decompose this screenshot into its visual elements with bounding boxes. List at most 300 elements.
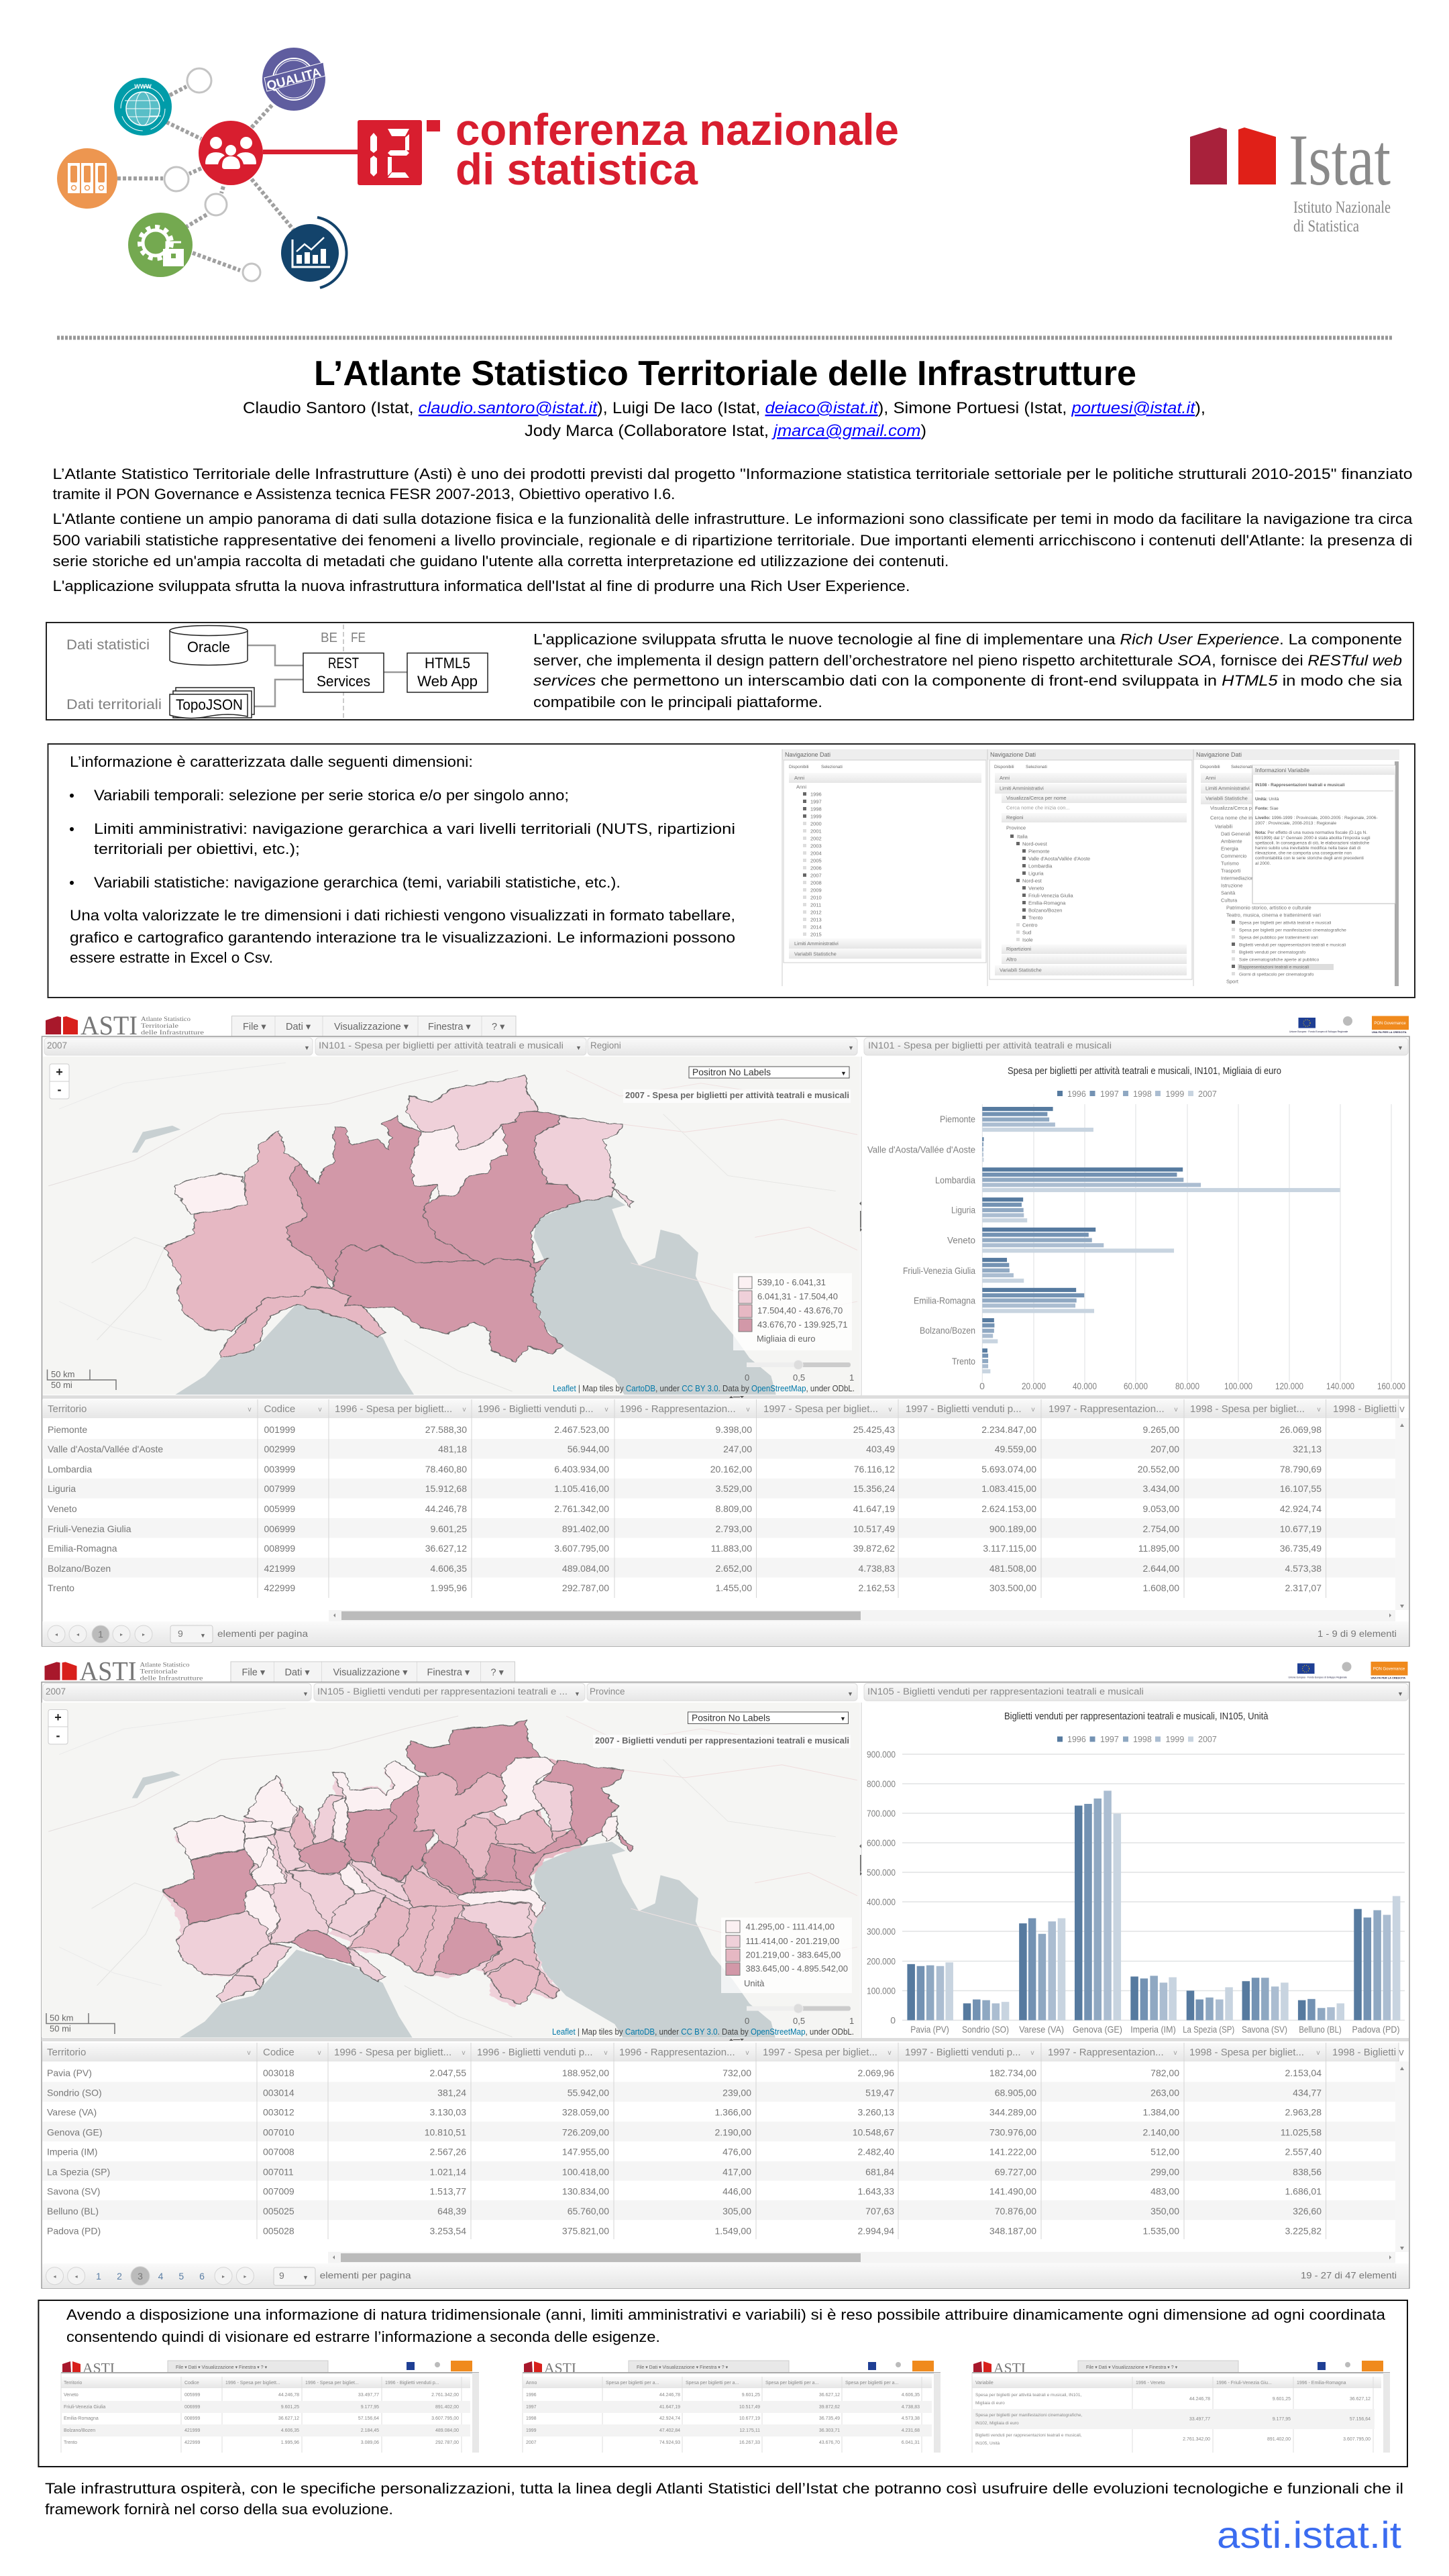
popup: informazioni variabile: rilevazione, che ne comporta una coseguente non: [1255, 851, 1352, 856]
screenshot: limiti amministrativi navigation: Nord-ovest: [1022, 841, 1048, 847]
intro text: L'applicazione sviluppata sfrutta la nuova infrastruttura informatica dell'Istat al fine di produrre una Rich User Experience.: [52, 578, 910, 594]
toolbar selects: ▼: [1397, 1690, 1403, 1697]
data table: province: 838,56: [1293, 2166, 1322, 2177]
screenshot: limiti amministrativi navigation: Province: [1006, 824, 1026, 830]
data table: regioni: 207,00: [1150, 1444, 1179, 1454]
thumbnail: table by variable: 2.761.342,00: [1183, 2437, 1210, 2442]
data table: province: 483,00: [1150, 2186, 1179, 2197]
table pager: elementi per pagina: [320, 2270, 411, 2281]
screenshot: variabili navigation with popup: Istruzione: [1221, 882, 1243, 888]
data table: province: v: [1316, 2049, 1320, 2057]
table pager: 5: [178, 2271, 184, 2282]
data table: province: 65.760,00: [568, 2206, 609, 2216]
data table: province: 730.976,00: [989, 2127, 1036, 2137]
thumbnail: table by year: 4.738,83: [902, 2405, 920, 2410]
data table: province: 130.834,00: [562, 2186, 609, 2197]
toolbar selects: 2007: [46, 1686, 66, 1697]
data table: regioni: 403,49: [866, 1444, 895, 1454]
chart legend: 1998: [1133, 1089, 1152, 1099]
architecture text: compatibile con le principali piattaforme.: [533, 694, 822, 710]
chart legend: 1997: [1100, 1089, 1119, 1099]
thumbnail: table by territory: 44.246,78: [278, 2393, 299, 2398]
data table: regioni: 10.677,19: [1280, 1523, 1322, 1534]
data table: regioni: v: [1318, 1406, 1320, 1413]
map legend: 539,10 - 6.041,31: [757, 1277, 826, 1287]
screenshot: anni navigation: [782, 749, 987, 986]
toolbar selects: Regioni: [590, 1040, 621, 1051]
table pager: 2: [117, 2271, 122, 2282]
screenshot: variabili navigation with popup: Variabili: [1215, 823, 1232, 829]
data table: province: 1998 - Biglietti v: [1332, 2047, 1404, 2058]
data table: province: 007010: [263, 2127, 294, 2137]
toolbar selects: ▼: [847, 1690, 853, 1697]
screenshot: limiti amministrativi navigation: Visualizza/Cerca per nome: [1006, 795, 1067, 801]
data table: regioni: 9.601,25: [431, 1523, 467, 1534]
toolbar selects: IN105 - Biglietti venduti per rappresentazioni teatrali e musicali: [867, 1686, 1144, 1697]
table pager: 4: [158, 2271, 164, 2282]
data table: province: 2.482,40: [857, 2147, 894, 2157]
bar chart: spesa per regione: 0: [979, 1381, 985, 1391]
data table: regioni: 76.116,12: [854, 1464, 895, 1474]
thumbnail: table by territory: Veneto: [64, 2393, 78, 2398]
data table: province: 1998 - Spesa per bigliet...: [1189, 2047, 1304, 2058]
data table: regioni: 2.652,00: [715, 1563, 752, 1574]
thumbnail: table by year: 41.647,19: [659, 2405, 680, 2410]
screenshot: limiti amministrativi navigation: Centro: [1022, 922, 1038, 928]
table pager: 3: [138, 2271, 143, 2282]
screenshot: variabili navigation with popup: Trasporti: [1221, 867, 1241, 873]
opacity slider: 1: [849, 1373, 854, 1383]
icon: gear and padlock: [128, 213, 193, 277]
toolbar selects: [44, 1038, 1408, 1055]
dimensions text: Variabili temporali: selezione per serie storica e/o per singolo anno;: [94, 787, 569, 804]
thumbnail: table by variable: Migliaia di euro: [975, 2401, 1005, 2406]
data table: regioni: 27.588,30: [425, 1424, 467, 1435]
ASTI header: [44, 1656, 1407, 1686]
data table: province: Territorio: [47, 2047, 86, 2058]
data table: province: v: [888, 2049, 891, 2057]
screenshot: limiti amministrativi navigation: Valle d'Aosta/Vallée d'Aoste: [1028, 856, 1090, 862]
intro text: [52, 466, 1413, 594]
data table: province: 005028: [263, 2225, 294, 2236]
panel text: [66, 2306, 1386, 2345]
panel: dimensions: [48, 744, 1415, 998]
data table: regioni: Codice: [264, 1403, 295, 1415]
thumbnail: table by variable: Biglietti venduti per rappresentazioni teatrali e musicali,: [975, 2433, 1082, 2438]
screenshot: limiti amministrativi navigation: Piemonte: [1028, 849, 1050, 855]
opacity slider: [745, 2004, 854, 2026]
conference name: di statistica: [455, 144, 698, 194]
column chart: biglietti per provincia: 900.000: [867, 1749, 896, 1760]
data table: regioni: 1.105.416,00: [554, 1483, 609, 1494]
screenshot: anni navigation: 2002: [810, 836, 822, 841]
data table: regioni: 41.647,19: [853, 1503, 895, 1514]
icon: people hub: [199, 121, 263, 185]
data table: province: 007009: [263, 2186, 294, 2197]
data table: regioni: 15.356,24: [853, 1483, 895, 1494]
thumbnail: table by variable: 57.156,64: [1350, 2417, 1371, 2422]
column chart: biglietti per provincia: 800.000: [867, 1778, 896, 1789]
thumbnail: table by year: 36.627,12: [819, 2393, 840, 2398]
table pager: ▸: [244, 2273, 246, 2279]
data table: province: 1997 - Spesa per bigliet...: [763, 2047, 877, 2058]
bar chart: spesa per regione: 40.000: [1073, 1381, 1097, 1391]
screenshot: limiti amministrativi navigation: Italia: [1017, 834, 1028, 840]
thumbnail: table by year: 1997: [526, 2405, 537, 2410]
dimensions text: grafico e cartografico garantendo interazione tra le visualizzazioni. Le informazioni possono: [70, 929, 735, 946]
screenshot: variabili navigation with popup: Spesa per biglietti per manifestazioni cinematografiche: [1239, 928, 1346, 933]
screenshot: variabili navigation with popup: Sale cinematografiche aperte al pubblico: [1239, 958, 1319, 963]
popup: informazioni variabile: Informazioni Variabile: [1255, 767, 1309, 773]
map scale: 50 mi: [50, 2024, 71, 2034]
data table: province: 69.727,00: [995, 2166, 1036, 2177]
panel: application screen 1 (regioni): [42, 1010, 1409, 1646]
data table: province: v: [462, 2049, 466, 2057]
data table: province: 182.734,00: [989, 2068, 1036, 2078]
thumbnail: table by variable: File ▾ Dati ▾ Visualizzazione ▾ Finestra ▾ ? ▾: [1086, 2365, 1178, 2370]
popup: informazioni variabile: al 2000.: [1255, 861, 1271, 866]
thumbnail: table by year: 1998: [526, 2416, 537, 2421]
column chart: biglietti per provincia: 600.000: [867, 1837, 896, 1848]
thumbnail: table by year: 39.872,62: [819, 2405, 840, 2410]
data table: regioni: 42.924,74: [1280, 1503, 1322, 1514]
screenshot: variabili navigation with popup: Giorni di spettacolo per cinematografo: [1239, 973, 1314, 977]
data table: regioni: 36.735,49: [1280, 1543, 1322, 1554]
thumbnail: table by variable: Variabile: [975, 2381, 994, 2385]
bar chart: spesa per regione: 60.000: [1124, 1381, 1148, 1391]
data table: regioni: Bolzano/Bozen: [48, 1563, 111, 1574]
data table: regioni: 39.872,62: [853, 1543, 895, 1554]
thumbnail: table by year: Anno: [526, 2381, 537, 2385]
column chart: biglietti per provincia: Imperia (IM): [1130, 2024, 1176, 2035]
intro text: 500 variabili statistiche rappresentative dei fenomeni a livello provinciale, regionale e di ripartizione territoriale. Due importanti elementi arricchiscono i contenuti dell'Atlante: la presenza di: [52, 532, 1413, 549]
data table: regioni: 20.552,00: [1138, 1464, 1179, 1474]
popup: informazioni variabile: 2007 : Provinciale, 2008-2013 : Regionale: [1255, 821, 1336, 826]
table pager: ◂: [55, 1631, 58, 1638]
data table: regioni: 1996 - Rappresentazion...: [620, 1403, 736, 1415]
data table: regioni: 008999: [264, 1543, 295, 1554]
data table: province: 263,00: [1150, 2087, 1179, 2098]
screenshot: anni navigation: Navigazione Dati: [785, 751, 830, 758]
opacity slider: 0,5: [793, 1373, 805, 1383]
architecture text: services che permettono un interscambio dati con la componente di front-end sviluppata in HTML5 in modo che sia: [533, 672, 1403, 689]
screenshot: anni navigation: 2010: [810, 895, 822, 900]
screenshot: variabili navigation with popup: Navigazione Dati: [1196, 751, 1242, 758]
column chart: biglietti per provincia: 700.000: [867, 1808, 896, 1819]
thumbnail: table by variable: Spesa per biglietti per manifestazioni cinematografiche,: [975, 2413, 1083, 2418]
table pager: ▼: [200, 1632, 206, 1639]
data table: regioni: 247,00: [723, 1444, 752, 1454]
data table: province: 375.821,00: [562, 2225, 609, 2236]
icon: www globe: [114, 78, 172, 136]
screenshot: anni navigation: 2007: [810, 872, 822, 879]
screenshot: limiti amministrativi navigation: Regioni: [1006, 814, 1024, 820]
bar chart: spesa per regione: Piemonte: [940, 1114, 975, 1124]
data table: province: 726.209,00: [562, 2127, 609, 2137]
column chart: biglietti per provincia: Padova (PD): [1352, 2024, 1399, 2035]
screenshot: variabili navigation with popup: Biglietti venduti per cinematografo: [1239, 951, 1306, 955]
data table: regioni: [42, 1395, 1409, 1646]
toolbar selects: ▼: [574, 1690, 580, 1697]
data table: regioni: 1996 - Spesa per bigliett...: [335, 1403, 452, 1415]
thumbnail: table by year: 12.175,11: [739, 2428, 760, 2433]
data table: regioni: 3.607.795,00: [554, 1543, 609, 1554]
screenshot: variabili navigation with popup: Rappresentazioni teatrali e musicali: [1239, 965, 1309, 970]
ASTI header: File ▾: [243, 1022, 266, 1032]
screenshot: anni navigation: Disponibili: [789, 765, 809, 769]
map legend: [721, 1917, 852, 1993]
ASTI header: PON Governance: [1373, 1668, 1405, 1672]
screenshot: limiti amministrativi navigation: Anni: [1000, 775, 1010, 781]
screenshot: anni navigation: Variabili Statistiche: [794, 951, 837, 957]
data table: regioni: 1997 - Rappresentazion...: [1049, 1403, 1165, 1415]
data table: province: 1.513,77: [429, 2186, 466, 2197]
panel: tridimensional information: [38, 2300, 1407, 2467]
ASTI header: ? ▾: [491, 1668, 504, 1678]
map controls: [50, 1064, 851, 1103]
screenshot: variabili navigation with popup: Spesa per biglietti per attività teatrali e musicali: [1239, 921, 1332, 926]
authors: [243, 399, 1205, 440]
data table: regioni: 001999: [264, 1424, 295, 1435]
opacity slider: 1: [849, 2016, 854, 2026]
architecture diagram: BE: [321, 631, 337, 645]
data table: province: Padova (PD): [47, 2225, 101, 2236]
map controls: [48, 1709, 851, 1748]
data table: province: 2.069,96: [857, 2068, 894, 2078]
thumbnail: table by territory: 292.787,00: [435, 2440, 459, 2445]
data table: regioni: 2.793,00: [715, 1523, 752, 1534]
map controls: -: [56, 1729, 60, 1742]
data table: regioni: 007999: [264, 1483, 295, 1494]
data table: province: 003012: [263, 2107, 294, 2118]
screenshot: anni navigation: 2013: [810, 916, 822, 923]
thumbnail: table by territory: 1.995,96: [281, 2440, 299, 2445]
thumbnail: table by territory: Friuli-Venezia Giulia: [64, 2405, 105, 2410]
toolbar selects: ▼: [303, 1690, 309, 1697]
popup: informazioni variabile: confrontabilità con le serie storiche degli anni precedenti: [1255, 856, 1364, 861]
data table: regioni: 78.790,69: [1280, 1464, 1322, 1474]
data table: regioni: v: [605, 1406, 608, 1413]
screenshot: limiti amministrativi navigation: Liguria: [1028, 871, 1044, 877]
data table: regioni: v: [318, 1406, 322, 1413]
screenshot: limiti amministrativi navigation: Isole: [1022, 937, 1033, 943]
map controls: ▼: [840, 1715, 846, 1722]
popup: informazioni variabile: [1252, 765, 1395, 904]
thumbnail: table by year: 43.676,70: [819, 2440, 840, 2445]
data table: regioni: 49.559,00: [995, 1444, 1036, 1454]
thumbnail: table by territory: 421999: [184, 2428, 200, 2433]
screenshot: limiti amministrativi navigation: Trento: [1028, 915, 1042, 921]
column chart: biglietti per provincia: 400.000: [867, 1896, 896, 1907]
architecture diagram: Services: [317, 673, 370, 690]
data table: regioni: 10.517,49: [853, 1523, 895, 1534]
map legend: [733, 1273, 852, 1350]
title: L’Atlante Statistico Territoriale delle Infrastrutture: [314, 354, 1136, 393]
data table: regioni: 9.265,00: [1143, 1424, 1179, 1435]
screenshot: limiti amministrativi navigation: Veneto: [1028, 885, 1044, 892]
map controls: +: [56, 1065, 63, 1079]
popup: informazioni variabile: hanno subito una inevitabile modifica nella base dati di: [1255, 846, 1360, 851]
dimensions text: Limiti amministrativi: navigazione gerarchica a vari livelli territoriali (NUTS, ripartizioni: [94, 820, 735, 837]
architecture diagram: Dati statistici: [66, 637, 150, 653]
bar chart: spesa per regione: 120.000: [1275, 1381, 1303, 1391]
screenshot: anni navigation: 2009: [810, 887, 822, 894]
thumbnail: table by territory: 2.184,45: [361, 2428, 379, 2433]
screenshot: variabili navigation with popup: Commercio: [1221, 853, 1246, 859]
data table: regioni: 1998 - Biglietti v: [1333, 1403, 1405, 1415]
bar chart: spesa per regione: 80.000: [1175, 1381, 1199, 1391]
thumbnail: table by variable: 3.607.795,00: [1343, 2437, 1371, 2442]
bar chart: spesa per regione: Emilia-Romagna: [914, 1295, 975, 1305]
data table: regioni: 15.912,68: [425, 1483, 467, 1494]
thumbnail: table by year: 4.573,38: [902, 2416, 920, 2421]
screenshot: variabili navigation with popup: Disponibili: [1200, 765, 1220, 769]
ASTI header: Atlante Statistico: [140, 1661, 190, 1668]
thumbnail: table by territory: 1996 - Spesa per bigliett...: [225, 2381, 280, 2385]
map controls: -: [58, 1083, 62, 1096]
data table: province: 007008: [263, 2147, 294, 2157]
architecture text: server, che implementa il design pattern dell’orchestratore nel pieno rispetto architetturale SOA, fornisce dei RESTful web: [533, 652, 1402, 669]
data table: regioni: 2.234.847,00: [981, 1424, 1036, 1435]
data table: regioni: 1998 - Spesa per bigliet...: [1190, 1403, 1305, 1415]
data table: province: 1996 - Spesa per bigliett...: [334, 2047, 451, 2058]
screenshot: variabili navigation with popup: Ambiente: [1221, 838, 1242, 844]
data table: province: 1.021,14: [429, 2166, 466, 2177]
thumbnail: table by year: Spesa per biglietti per a...: [606, 2381, 659, 2385]
data table: regioni: 005999: [264, 1503, 295, 1514]
data table: regioni: 9.053,00: [1143, 1503, 1179, 1514]
data table: province: 434,77: [1293, 2087, 1322, 2098]
data table: regioni: 421999: [264, 1563, 295, 1574]
data table: province: 007011: [263, 2166, 294, 2177]
thumbnail: table by variable: Spesa per biglietti per attività teatrali e musicali, IN101,: [975, 2393, 1081, 2398]
data table: regioni: Valle d'Aosta/Vallée d'Aoste: [48, 1444, 163, 1454]
column chart: biglietti per provincia: Genova (GE): [1073, 2024, 1122, 2035]
popup: informazioni variabile: spettacoli. In conseguenza di ciò, le elaborazioni statistiche: [1255, 841, 1370, 845]
thumbnail: table by territory: 33.497,77: [358, 2393, 379, 2398]
data table: regioni: 2.761.342,00: [554, 1503, 609, 1514]
data table: province: 3.253,54: [429, 2225, 466, 2236]
column chart: biglietti per provincia: 500.000: [867, 1867, 896, 1878]
map attribution: Leaflet | Map tiles by CartoDB, under CC BY 3.0. Data by OpenStreetMap, under ODbL.: [553, 1383, 855, 1393]
data table: province: 2.557,40: [1285, 2147, 1322, 2157]
screenshot: anni navigation: Anni: [794, 775, 804, 781]
thumbnail: table by year: 9.601,25: [742, 2393, 760, 2398]
thumbnail: table by variable: [972, 2360, 1390, 2453]
ASTI header: ASTI: [79, 1656, 137, 1686]
popup: informazioni variabile: Livello: 1996-1999 : Provinciale, 2000-2005 : Regionale, 2006-: [1255, 816, 1378, 820]
thumbnail: table by territory: Codice: [184, 2381, 199, 2385]
table pager: elementi per pagina: [217, 1628, 308, 1639]
Istat logo: di Statistica: [1293, 217, 1359, 235]
data table: province: 3.130,03: [429, 2107, 466, 2118]
ASTI header: delle Infrastrutture: [141, 1029, 204, 1036]
screenshot: anni navigation: 1998: [810, 806, 822, 812]
closing text: framework fornirà nel corso della sua evoluzione.: [45, 2501, 393, 2518]
screenshot: anni navigation: 2004: [810, 851, 822, 856]
data table: regioni: v: [463, 1406, 466, 1413]
thumbnail: table by year: Spesa per biglietti per a...: [686, 2381, 739, 2385]
panel text: Avendo a disposizione una informazione di natura tridimensionale (anni, limiti amministrativi e variabili) si è reso possibile attribuire dinamicamente ogni dimensione ad ogni coordinata: [66, 2306, 1386, 2323]
architecture diagram: [66, 625, 488, 718]
data table: regioni: 2.644,00: [1143, 1563, 1179, 1574]
map controls: 2007 - Spesa per biglietti per attività teatrali e musicali: [625, 1090, 849, 1100]
table pager: ▸: [222, 2273, 225, 2279]
thumbnail: table by year: 6.041,31: [902, 2440, 920, 2445]
chart legend: 2007: [1198, 1735, 1217, 1744]
data table: province: 1.535,00: [1143, 2225, 1179, 2236]
screenshot: anni navigation: Selezionati: [821, 765, 843, 769]
thumbnail: table by territory: Bolzano/Bozen: [64, 2428, 95, 2433]
screenshot: anni navigation: 2015: [810, 931, 822, 938]
thumbnail: table by territory: 005999: [184, 2393, 200, 2398]
Istat logo: Istat: [1289, 119, 1391, 201]
conference name: conferenza nazionale: [455, 105, 899, 154]
map legend: Unità: [744, 1978, 765, 1988]
data table: regioni: 1997 - Biglietti venduti p...: [906, 1403, 1022, 1415]
Istat logo: Istituto Nazionale: [1293, 199, 1391, 217]
ASTI header: Atlante Statistico: [141, 1016, 191, 1022]
data table: province: 1996 - Rappresentazion...: [619, 2047, 735, 2058]
thumbnail: table by year: 44.246,78: [659, 2393, 680, 2398]
data table: province: v: [604, 2049, 608, 2057]
thumbnail: table by territory: Trento: [64, 2440, 77, 2445]
screenshot: anni navigation: 1996: [810, 792, 822, 797]
column chart: biglietti per provincia: [867, 1711, 1405, 2035]
thumbnail: table by territory: 36.627,12: [278, 2416, 299, 2421]
data table: regioni: 006999: [264, 1523, 295, 1534]
dimensions text: [70, 753, 735, 966]
ASTI header: Visualizzazione ▾: [333, 1668, 408, 1678]
data table: province: 70.876,00: [995, 2206, 1036, 2216]
screenshot: limiti amministrativi navigation: Altro: [1006, 956, 1016, 962]
ASTI header: ? ▾: [492, 1022, 505, 1032]
ASTI header: ASTI: [80, 1010, 138, 1040]
data table: regioni: v: [248, 1406, 251, 1413]
popup: informazioni variabile: Nota: Per effetto di una nuova normativa fiscale (D.Lgs N.: [1255, 830, 1367, 835]
data table: province: v: [247, 2049, 251, 2057]
column chart: biglietti per provincia: Sondrio (SO): [962, 2024, 1009, 2035]
screenshot: limiti amministrativi navigation: Friuli-Venezia Giulia: [1028, 893, 1074, 899]
screenshot: limiti amministrativi navigation: Bolzano/Bozen: [1028, 908, 1062, 914]
thumbnail: table by year: File ▾ Dati ▾ Visualizzazione ▾ Finestra ▾ ? ▾: [637, 2365, 729, 2370]
map legend: 6.041,31 - 17.504,40: [757, 1291, 838, 1301]
bar chart: spesa per regione: Trento: [952, 1356, 975, 1366]
data table: province: 1.643,33: [857, 2186, 894, 2197]
thumbnail: table by variable: 9.177,95: [1273, 2417, 1291, 2422]
closing text: [45, 2480, 1403, 2518]
column chart: biglietti per provincia: 300.000: [867, 1926, 896, 1937]
thumbnail: table by territory: 489.084,00: [435, 2428, 459, 2433]
thumbnail: table by territory: 9.177,95: [361, 2405, 379, 2410]
data table: province: 1.549,00: [715, 2225, 751, 2236]
thumbnail: table by territory: 008999: [184, 2416, 200, 2421]
thumbnail: table by year: 10.517,49: [739, 2405, 760, 2410]
Istat logo: [1190, 119, 1391, 235]
data table: province: 519,47: [865, 2087, 894, 2098]
data table: province: 2.190,00: [715, 2127, 751, 2137]
data table: regioni: 900.189,00: [989, 1523, 1036, 1534]
bar chart: spesa per regione: [867, 1065, 1405, 1391]
table pager: 19 - 27 di 47 elementi: [1301, 2270, 1397, 2281]
data table: regioni: 1996 - Biglietti venduti p...: [478, 1403, 594, 1415]
bar chart: spesa per regione: Lombardia: [935, 1175, 975, 1185]
data table: province: 141.222,00: [989, 2147, 1036, 2157]
screenshot: limiti amministrativi navigation: Ripartizioni: [1006, 946, 1031, 952]
map legend: 383.645,00 - 4.895.542,00: [746, 1964, 848, 1974]
bar chart: spesa per regione: Friuli-Venezia Giulia: [903, 1265, 975, 1276]
intro text: L’Atlante Statistico Territoriale delle Infrastrutture (Asti) è uno dei prodotti previsti dal progetto "Informazione statistica territoriale settoriale per le politiche strutturali 2010-2015" finanziato: [52, 466, 1413, 482]
